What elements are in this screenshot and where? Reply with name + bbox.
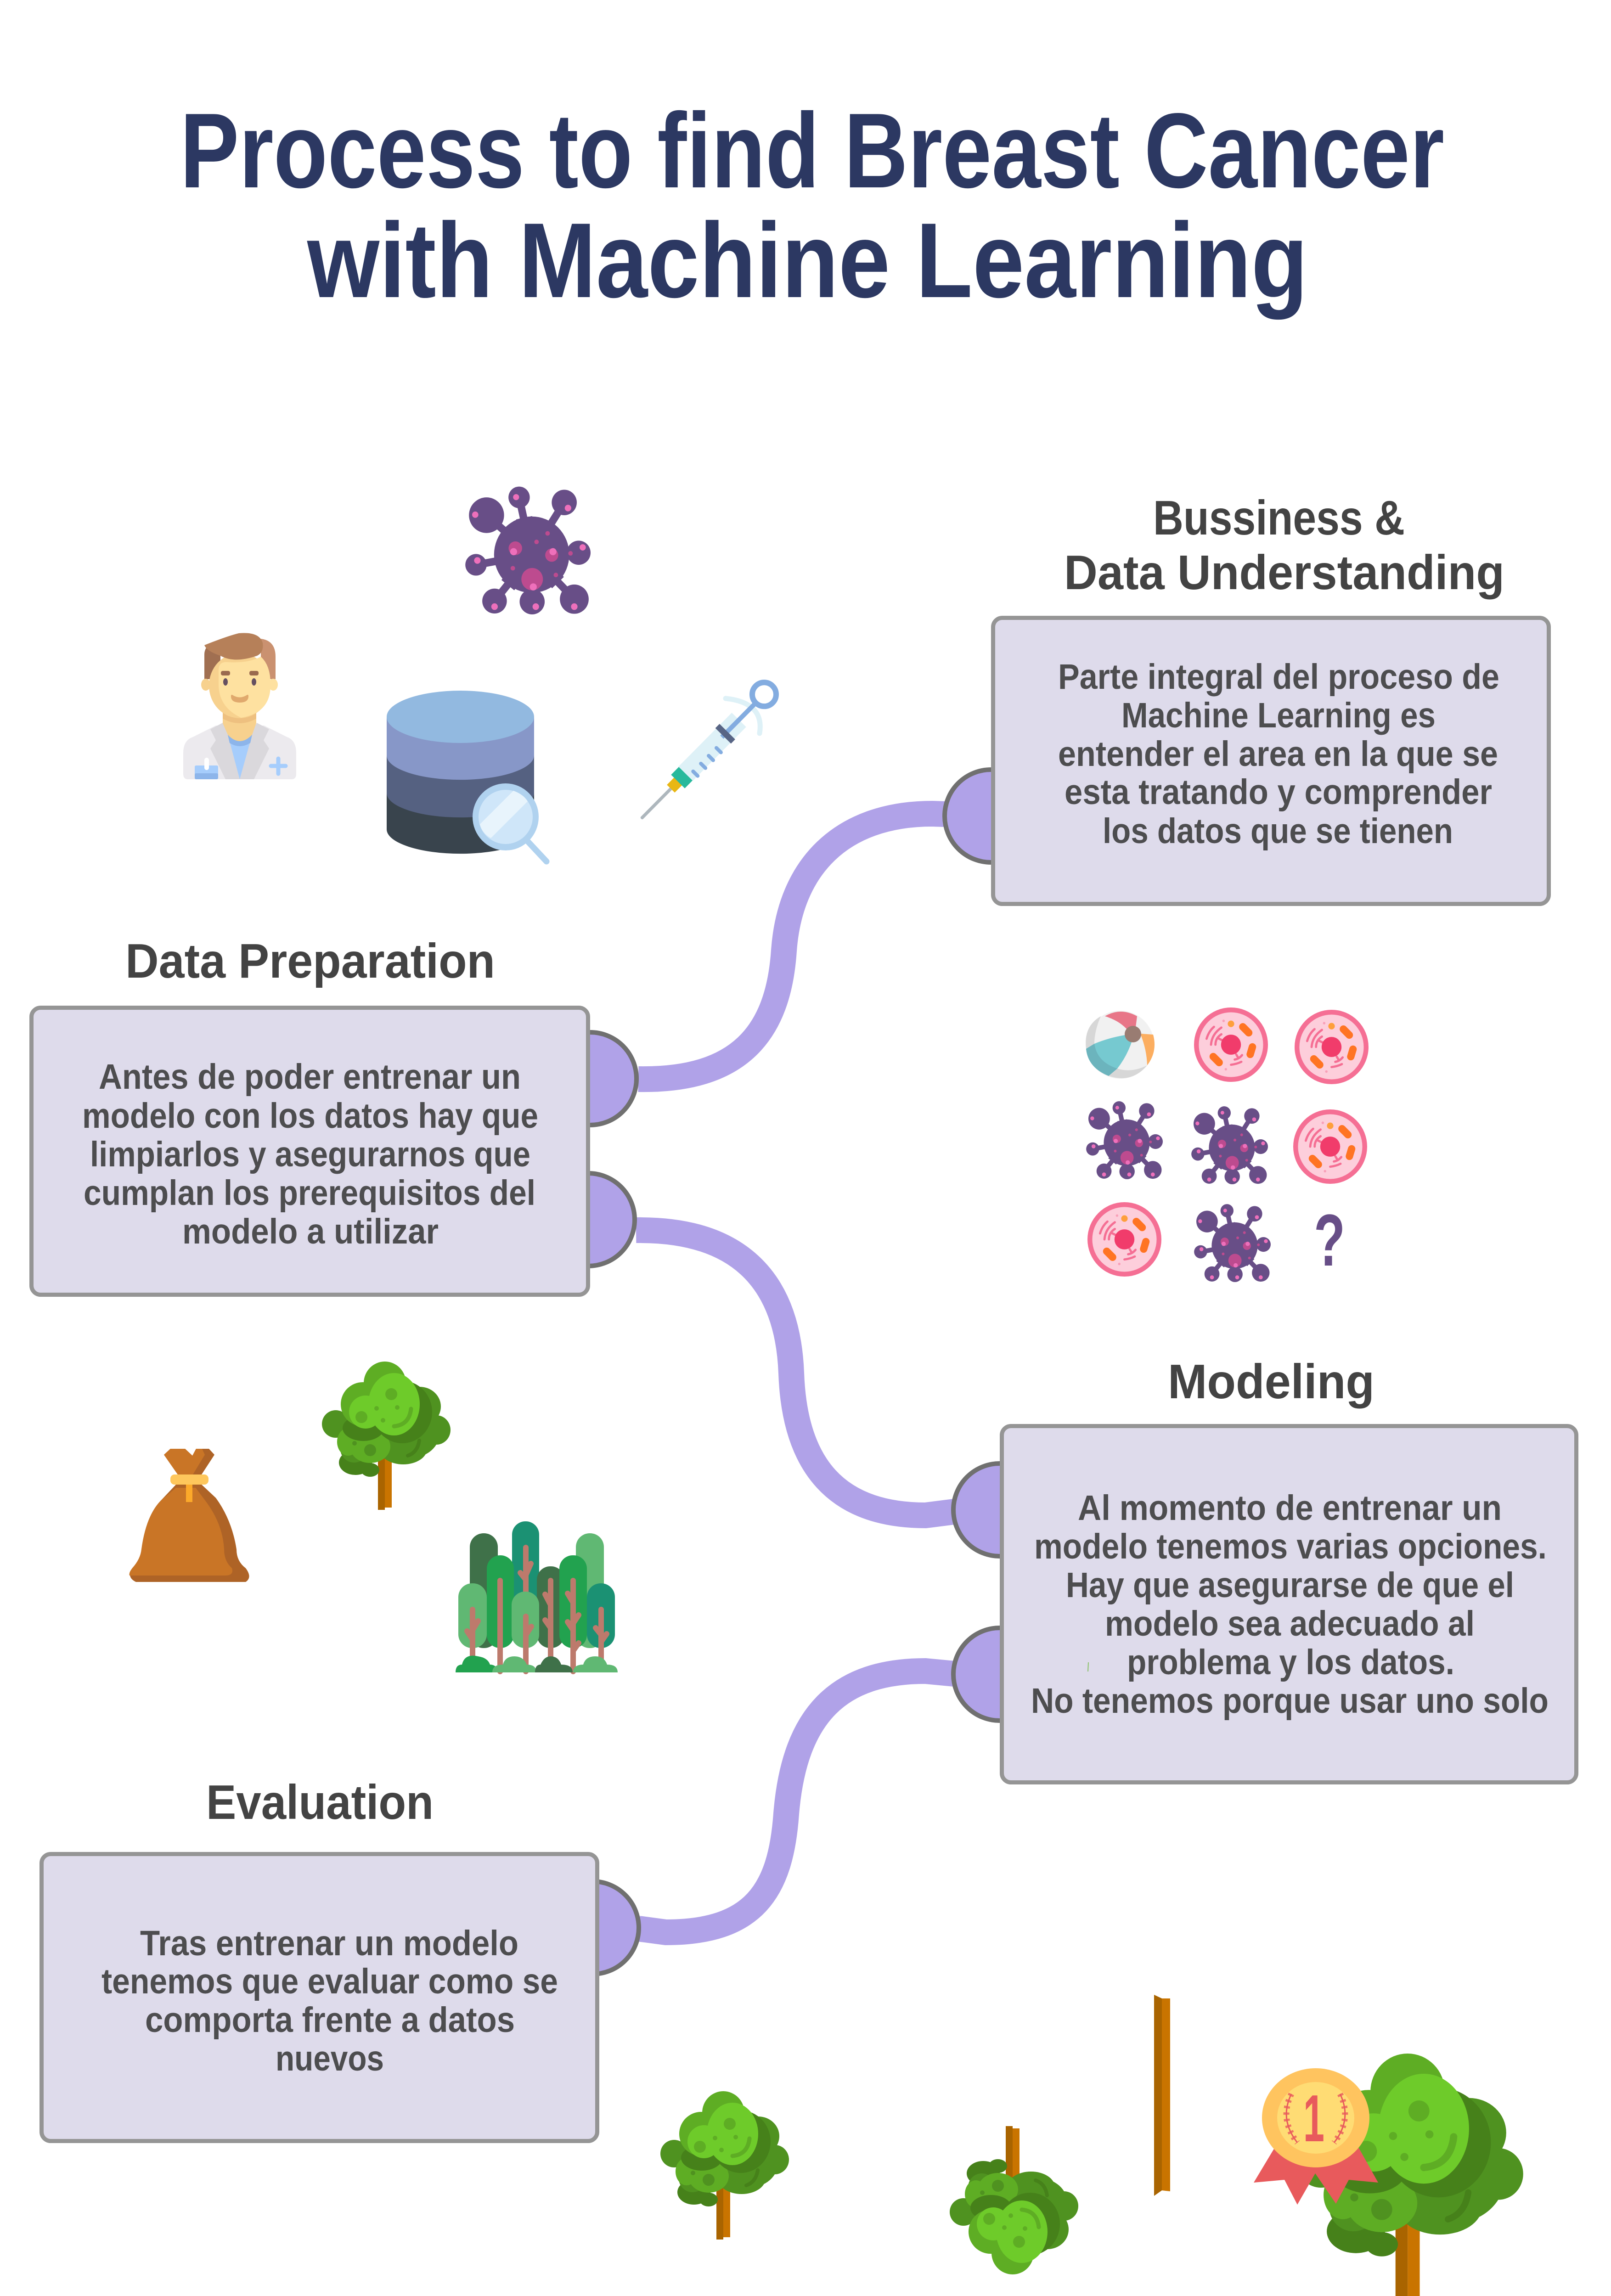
icon: virus 3 bbox=[1194, 1204, 1271, 1282]
body text: comporta frente a datos bbox=[145, 2000, 515, 2040]
connector knob bbox=[945, 770, 1037, 862]
body text: Tras entrenar un modelo bbox=[140, 1924, 518, 1963]
icon: money bag bbox=[130, 1449, 249, 1582]
panel: modeling bbox=[953, 1355, 1576, 1783]
panel: business and data understanding bbox=[945, 491, 1549, 904]
body text: modelo tenemos varias opciones. bbox=[1034, 1527, 1547, 1566]
icon: cell 1 bbox=[1194, 1007, 1268, 1082]
connector knob top bbox=[953, 1463, 1046, 1556]
box bbox=[31, 1007, 588, 1295]
title: with Machine Learning bbox=[307, 201, 1308, 320]
panel: evaluation bbox=[41, 1775, 639, 2141]
title bbox=[180, 91, 1444, 320]
icon: tree bbox=[322, 1362, 451, 1510]
body text: limpiarlos y asegurarnos que bbox=[90, 1135, 530, 1174]
heading: business bbox=[1064, 491, 1504, 600]
icon: forest bbox=[456, 1521, 618, 1672]
heading: evaluation: Evaluation bbox=[206, 1775, 434, 1829]
icon: syringe bbox=[633, 677, 781, 827]
icon: medal bbox=[1254, 2068, 1378, 2205]
body text: esta tratando y comprender bbox=[1065, 772, 1492, 812]
box bbox=[41, 1854, 597, 2141]
body text bbox=[82, 1057, 538, 1251]
body text: No tenemos porque usar uno solo bbox=[1031, 1681, 1549, 1721]
connector knob bbox=[546, 1881, 639, 1974]
body text: Parte integral del proceso de bbox=[1058, 657, 1499, 697]
chart: cell classification grid bbox=[1086, 1007, 1369, 1282]
panel: data preparation bbox=[31, 934, 637, 1295]
icon: small tree bbox=[660, 2091, 789, 2240]
icon: question mark: ? bbox=[1314, 1199, 1345, 1281]
heading: business: Data Understanding bbox=[1064, 546, 1504, 600]
heading: modeling: Modeling bbox=[1168, 1355, 1374, 1409]
icon: medal: 1 bbox=[1303, 2081, 1324, 2155]
body text: tenemos que evaluar como se bbox=[101, 1962, 558, 2001]
icon: virus 1 bbox=[1086, 1101, 1163, 1179]
icon: cell 4 bbox=[1087, 1202, 1161, 1277]
icon: cell 3 bbox=[1293, 1109, 1367, 1184]
connector: data preparation to business understanding bbox=[638, 814, 946, 1079]
icon: virus 2 bbox=[1191, 1106, 1268, 1184]
body text: entender el area en la que se bbox=[1058, 734, 1498, 774]
body text: Antes de poder entrenar un bbox=[99, 1057, 521, 1097]
body text: modelo a utilizar bbox=[182, 1212, 439, 1251]
body text: Hay que asegurarse de que el bbox=[1066, 1565, 1514, 1605]
body text: los datos que se tienen bbox=[1103, 811, 1453, 851]
icon: beach ball bbox=[1086, 1011, 1155, 1079]
icon: database with magnifier bbox=[387, 691, 546, 861]
body text: problema y los datos. bbox=[1127, 1643, 1454, 1682]
body text: modelo sea adecuado al bbox=[1105, 1604, 1475, 1643]
body text bbox=[101, 1924, 558, 2078]
magnifier bbox=[473, 783, 546, 861]
icon: upside-down tree bbox=[950, 2126, 1078, 2274]
connector knob bottom bbox=[542, 1173, 635, 1266]
body text: nuevos bbox=[276, 2039, 384, 2078]
heading: data preparation: Data Preparation bbox=[125, 934, 495, 988]
icon: bare trunk bbox=[1154, 1995, 1170, 2196]
box bbox=[993, 618, 1549, 904]
heading: business: Bussiness & bbox=[1153, 491, 1405, 545]
connector: data preparation to modeling bbox=[636, 1230, 954, 1515]
connector knob top bbox=[544, 1032, 637, 1125]
connector knob bottom bbox=[953, 1628, 1046, 1721]
icon: doctor bbox=[183, 633, 296, 779]
connector: modeling to evaluation bbox=[638, 1671, 954, 1932]
body text: Al momento de entrenar un bbox=[1078, 1488, 1502, 1528]
body text: modelo con los datos hay que bbox=[82, 1096, 538, 1136]
body text bbox=[1058, 657, 1499, 851]
body text bbox=[1031, 1488, 1549, 1721]
box bbox=[1002, 1426, 1576, 1783]
body text: cumplan los prerequisitos del bbox=[84, 1173, 535, 1213]
icon: cell 2 bbox=[1295, 1010, 1369, 1084]
icon: large tree bbox=[1297, 2054, 1523, 2296]
icon: large virus bbox=[465, 487, 591, 614]
body text: Machine Learning es bbox=[1121, 696, 1436, 735]
